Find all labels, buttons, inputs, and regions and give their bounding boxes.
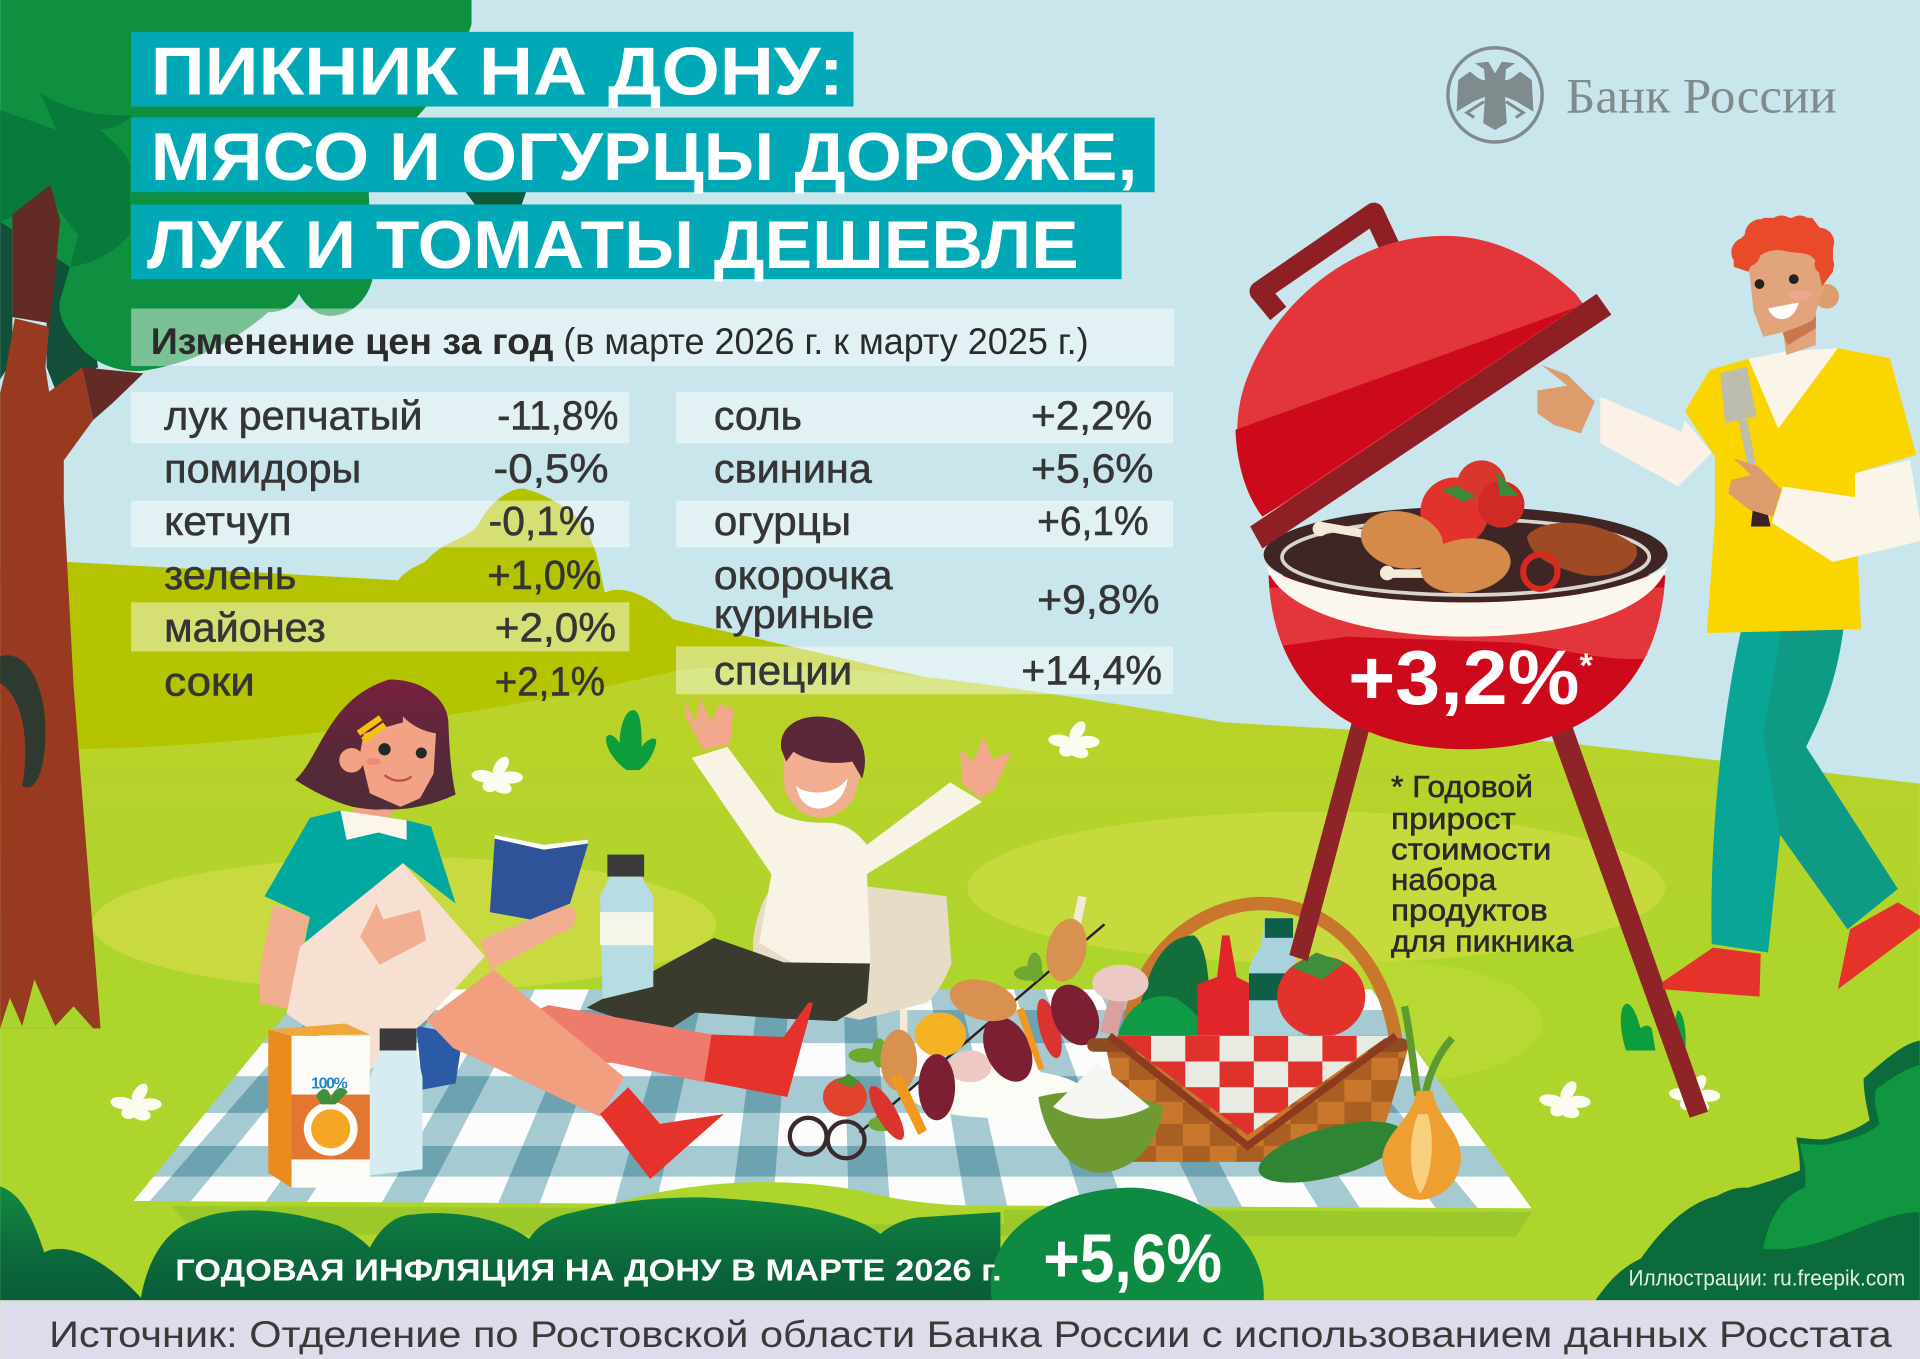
picnic blanket [123,989,1543,1237]
tree [0,0,529,1028]
skewer herbs [849,953,1043,1131]
book [490,835,588,919]
boy sitting [587,697,1011,1028]
tree foliage [0,0,529,371]
title line 1: ПИКНИК НА ДОНУ: [151,34,844,109]
price table right: +14,4% [1021,647,1162,693]
food on blanket [823,896,1109,1144]
mushroom left [948,1050,992,1082]
subtitle period: (в марте 2026 г. к марту 2025 г.) [563,321,1089,362]
pepper [915,1013,966,1057]
girl collar [340,811,407,840]
girl front leg [426,970,625,1117]
subtitle bold: Изменение цен за год [151,321,554,362]
man face [1748,239,1839,337]
boy trousers [587,938,870,1028]
inflation value: +5,6% [1043,1220,1222,1297]
tree hollow [0,655,45,788]
price table left: помидоры [164,445,361,491]
price table right: соль [714,393,802,439]
basket rim [1087,1038,1408,1052]
title [131,32,1155,283]
illustration credit: Иллюстрации: ru.freepik.com [1628,1266,1905,1291]
girl hair [295,680,456,810]
girl sitting [260,680,813,1179]
price table right: куриные [714,591,874,637]
price table left: соки [164,658,255,704]
meat 3 [1042,977,1109,1053]
basket body [1104,1041,1411,1162]
grilled food [1313,460,1637,599]
meat 2 [973,1009,1042,1090]
price table right: +5,6% [1031,445,1153,491]
girl neck [353,790,410,820]
juice box [268,1024,370,1188]
drumstick 2 [1380,533,1514,599]
basket cloth [1117,1036,1389,1135]
tomato on blanket [823,1074,867,1117]
grill footnote [1391,770,1574,958]
drumstick top [1041,896,1092,985]
flowers and grass [110,710,1720,1123]
man lower sleeve [1772,460,1920,562]
price table right: свинина [714,445,872,491]
price table right: +6,1% [1037,498,1149,544]
plate [909,1069,1085,1118]
grill legs [1289,698,1708,1118]
blanket shadow [172,1206,1532,1237]
boy hands [685,697,1011,798]
man shirt [1685,348,1916,633]
man pointing hand [1537,365,1595,433]
grill footnote: продуктов [1391,894,1548,928]
grass mound over blanket edge [588,1182,1004,1224]
bottom bushes [0,1041,1920,1300]
girl skirt [416,1026,463,1090]
onion [1382,1006,1461,1200]
price table left: кетчуп [164,498,292,544]
boot right [704,1003,813,1097]
carrot middle [1016,1008,1044,1070]
red sausage left [863,1082,910,1144]
logo: Bank of Russia [1448,48,1837,142]
juice label: 100% [311,1075,348,1092]
price table left [131,392,629,704]
drumstick 1 [1313,504,1449,576]
tree back shadow [0,214,98,389]
cucumber [1252,1109,1409,1195]
girl reading arm [480,906,576,970]
tree trunk [0,185,143,1028]
title line 3: ЛУК И ТОМАТЫ ДЕШЕВЛЕ [147,208,1079,283]
pepper ring [1523,555,1557,589]
grill [1235,213,1708,1118]
girl eyes and mouth [366,743,427,781]
girl back shin [478,1005,711,1082]
man shoes [1663,902,1920,997]
mushroom right [1092,965,1149,1036]
grill footnote: прирост [1391,802,1516,836]
basket strap [1109,1036,1396,1146]
price table right [676,392,1173,694]
man cooking [1537,215,1920,997]
girl pillow [287,863,485,1070]
logo emblem [1448,48,1542,142]
source text: Источник: Отделение по Ростовской области Банка России с использованием данных Росстата [49,1314,1892,1355]
basket handle [1128,904,1396,1041]
price table right: окорочка [714,552,893,598]
price table left: лук репчатый [164,393,423,439]
skewer carrot left [890,1074,927,1135]
title line 2: МЯСО И ОГУРЦЫ ДОРОЖЕ, [151,120,1138,195]
grill percentage: +3,2% [1348,635,1580,721]
price table left: зелень [164,552,296,598]
source bar [0,1300,1920,1359]
inflation caption: ГОДОВАЯ ИНФЛЯЦИЯ НА ДОНУ В МАРТЕ 2026 г. [175,1254,1002,1288]
grill dome [1235,236,1611,548]
girl left arm [260,905,310,1010]
boy shirt [692,747,982,979]
grill footnote: для пикника [1391,924,1574,958]
price table left: -11,8% [497,393,618,439]
man eyes and smile [1755,274,1811,319]
basket bottle [1249,918,1298,1036]
man trousers [1711,624,1898,953]
drumstick on skewer [880,1009,917,1091]
subtitle bar [131,309,1174,366]
price table left: +2,1% [495,658,605,704]
price table left: майонез [164,605,326,651]
grill bowl [1261,507,1677,749]
trunk base grass [0,979,93,1028]
basket tomato [1277,953,1365,1037]
girl hand [360,904,426,965]
juice leaves [316,1088,348,1104]
grill percentage: * [1580,647,1594,685]
price table left: +1,0% [487,552,601,598]
red sausage right [1032,996,1067,1061]
man upper sleeve [1600,397,1712,487]
bottle near boy [600,855,653,999]
meadow light patches [92,812,1665,1084]
logo wordmark: Банк России [1566,68,1837,124]
price table right: огурцы [714,498,851,544]
roasted chunk [945,972,1021,1028]
boot left [600,1087,724,1179]
bottle near juice [370,1028,423,1175]
grill footnote: набора [1391,863,1497,897]
olive back hill [0,489,1224,857]
blanket cloth with checks [123,989,1543,1208]
price table right: +9,8% [1037,576,1160,622]
girl shirt [265,811,456,946]
price table right: специи [714,647,852,693]
grill footnote: * Годовой [1391,770,1533,804]
grill handle [1260,213,1391,313]
tomatoes [1420,460,1524,546]
man neck [1783,312,1816,355]
meat 1 [918,1054,955,1120]
picnic basket [1087,904,1411,1162]
basket greens [1117,935,1209,1038]
price table left: -0,1% [489,498,595,544]
ketchup [1198,935,1251,1036]
steak [1527,523,1637,576]
grill footnote: стоимости [1391,832,1551,866]
price table right: +2,2% [1031,393,1152,439]
price table left: +2,0% [495,605,616,651]
boy head [781,717,865,817]
skewer stick [860,924,1104,1132]
man undershirt [1748,348,1838,429]
salt bowl [1038,1063,1163,1173]
girl hairclip [357,715,387,743]
glasses [790,1118,865,1158]
man holding hand [1728,458,1782,517]
boy pillow [753,886,951,1020]
spatula [1720,367,1771,526]
girl face [339,716,436,807]
price table left: -0,5% [494,445,609,491]
lime meadow [0,666,1920,1359]
man hair [1731,215,1834,286]
